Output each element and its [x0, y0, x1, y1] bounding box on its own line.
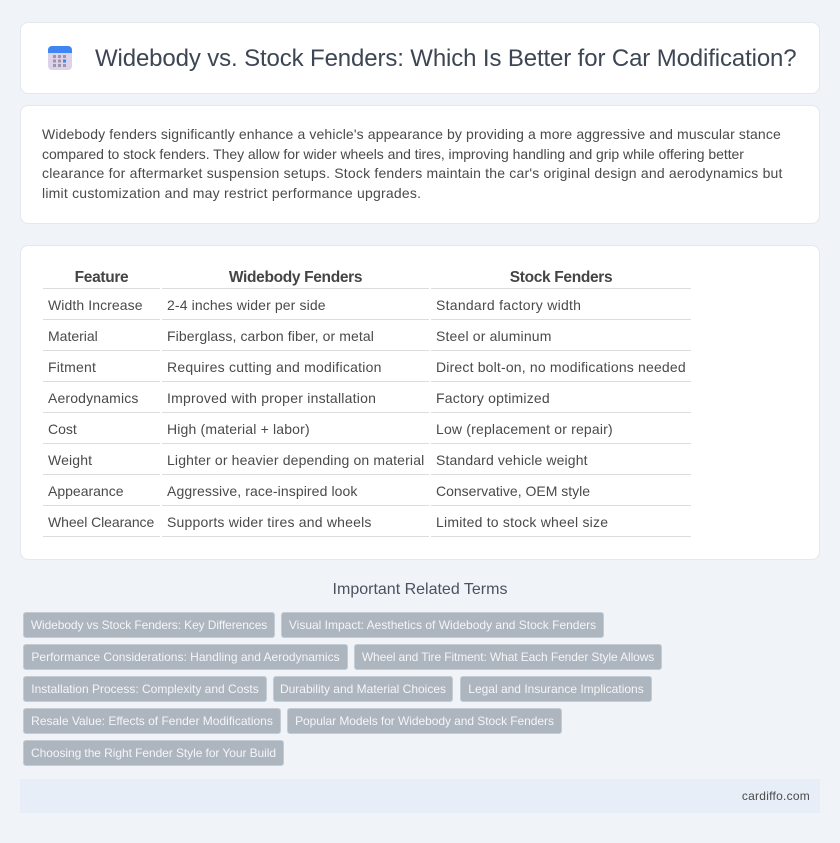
table header: Widebody Fenders: [229, 269, 362, 286]
table header: [75, 269, 612, 286]
table: feature comparison: [43, 269, 691, 537]
row: aerodynamics: [48, 390, 550, 406]
text block: introduction: compared to stock fenders. They allow for wider wheels and tires, improving handling and grip while offering better: [42, 146, 744, 162]
row: aerodynamics: Improved with proper installation: [167, 390, 376, 406]
tag: Wheel and Tire Fitment: What Each Fender Style Allows: [362, 650, 654, 664]
row: appearance: Conservative, OEM style: [436, 483, 590, 499]
row: material: [48, 328, 552, 344]
related term tags: [23, 612, 662, 766]
row: cost: Low (replacement or repair): [436, 421, 613, 437]
row: weight: [48, 452, 588, 468]
tag: [460, 676, 652, 702]
table header: Feature: [75, 269, 128, 286]
tag: [273, 676, 453, 702]
row: width increase: 2-4 inches wider per side: [167, 297, 326, 313]
tag: Durability and Material Choices: [280, 682, 446, 696]
title: Widebody vs. Stock Fenders: Which Is Better for Car Modification?: [95, 45, 796, 72]
row: material: Material: [48, 328, 98, 344]
row: cost: [48, 421, 613, 437]
row: width increase: [48, 297, 581, 313]
row: weight: Weight: [48, 452, 92, 468]
tag: [281, 612, 604, 638]
row: wheel clearance: Limited to stock wheel size: [436, 514, 608, 530]
panel: comparison table: [20, 245, 820, 560]
tag: [287, 708, 562, 734]
text block: introduction: clearance for aftermarket suspension setups. Stock fenders maintain the car's original design and aerodynamics but: [42, 165, 783, 181]
text block: introduction: limit customization and may restrict performance upgrades.: [42, 184, 421, 200]
tag: [23, 612, 275, 638]
tag: Popular Models for Widebody and Stock Fenders: [295, 714, 554, 728]
text block: introduction: [42, 126, 783, 201]
row: aerodynamics: Factory optimized: [436, 390, 550, 406]
tag: Choosing the Right Fender Style for Your Build: [31, 746, 276, 760]
row: cost: High (material + labor): [167, 421, 310, 437]
tag: [23, 676, 267, 702]
footer bar: [20, 779, 820, 813]
row: fitment: Direct bolt-on, no modifications needed: [436, 359, 686, 375]
row: appearance: Aggressive, race-inspired look: [167, 483, 358, 499]
row: wheel clearance: Supports wider tires and wheels: [167, 514, 372, 530]
tag: Legal and Insurance Implications: [468, 682, 644, 696]
row: width increase: Width Increase: [48, 297, 143, 313]
row: wheel clearance: [48, 514, 608, 530]
row: appearance: [48, 483, 590, 499]
tag: Performance Considerations: Handling and Aerodynamics: [31, 650, 340, 664]
panel: introduction: [20, 105, 820, 224]
heading: related terms: Important Related Terms: [333, 581, 507, 598]
row: aerodynamics: Aerodynamics: [48, 390, 139, 406]
icon: calendar: [48, 46, 72, 70]
row: fitment: Fitment: [48, 359, 96, 375]
tag: Resale Value: Effects of Fender Modifications: [31, 714, 273, 728]
tag: [23, 708, 281, 734]
row: material: Steel or aluminum: [436, 328, 552, 344]
row: appearance: Appearance: [48, 483, 124, 499]
row: wheel clearance: Wheel Clearance: [48, 514, 154, 530]
table header: Stock Fenders: [510, 269, 612, 286]
row: weight: Lighter or heavier depending on material: [167, 452, 424, 468]
row: cost: Cost: [48, 421, 77, 437]
tag: Visual Impact: Aesthetics of Widebody and Stock Fenders: [289, 618, 596, 632]
row: fitment: Requires cutting and modification: [167, 359, 382, 375]
panel: title header: [20, 22, 820, 94]
footer text: cardiffo.com: [742, 789, 810, 803]
tag: Widebody vs Stock Fenders: Key Differences: [31, 618, 267, 632]
row: weight: Standard vehicle weight: [436, 452, 588, 468]
row: width increase: Standard factory width: [436, 297, 581, 313]
tag: [354, 644, 662, 670]
tag: Installation Process: Complexity and Costs: [31, 682, 259, 696]
tag: [23, 644, 348, 670]
row: material: Fiberglass, carbon fiber, or metal: [167, 328, 374, 344]
row: fitment: [48, 359, 686, 375]
text block: introduction: Widebody fenders significantly enhance a vehicle's appearance by providing a more aggressive and muscular stance: [42, 126, 781, 142]
tag: [23, 740, 284, 766]
